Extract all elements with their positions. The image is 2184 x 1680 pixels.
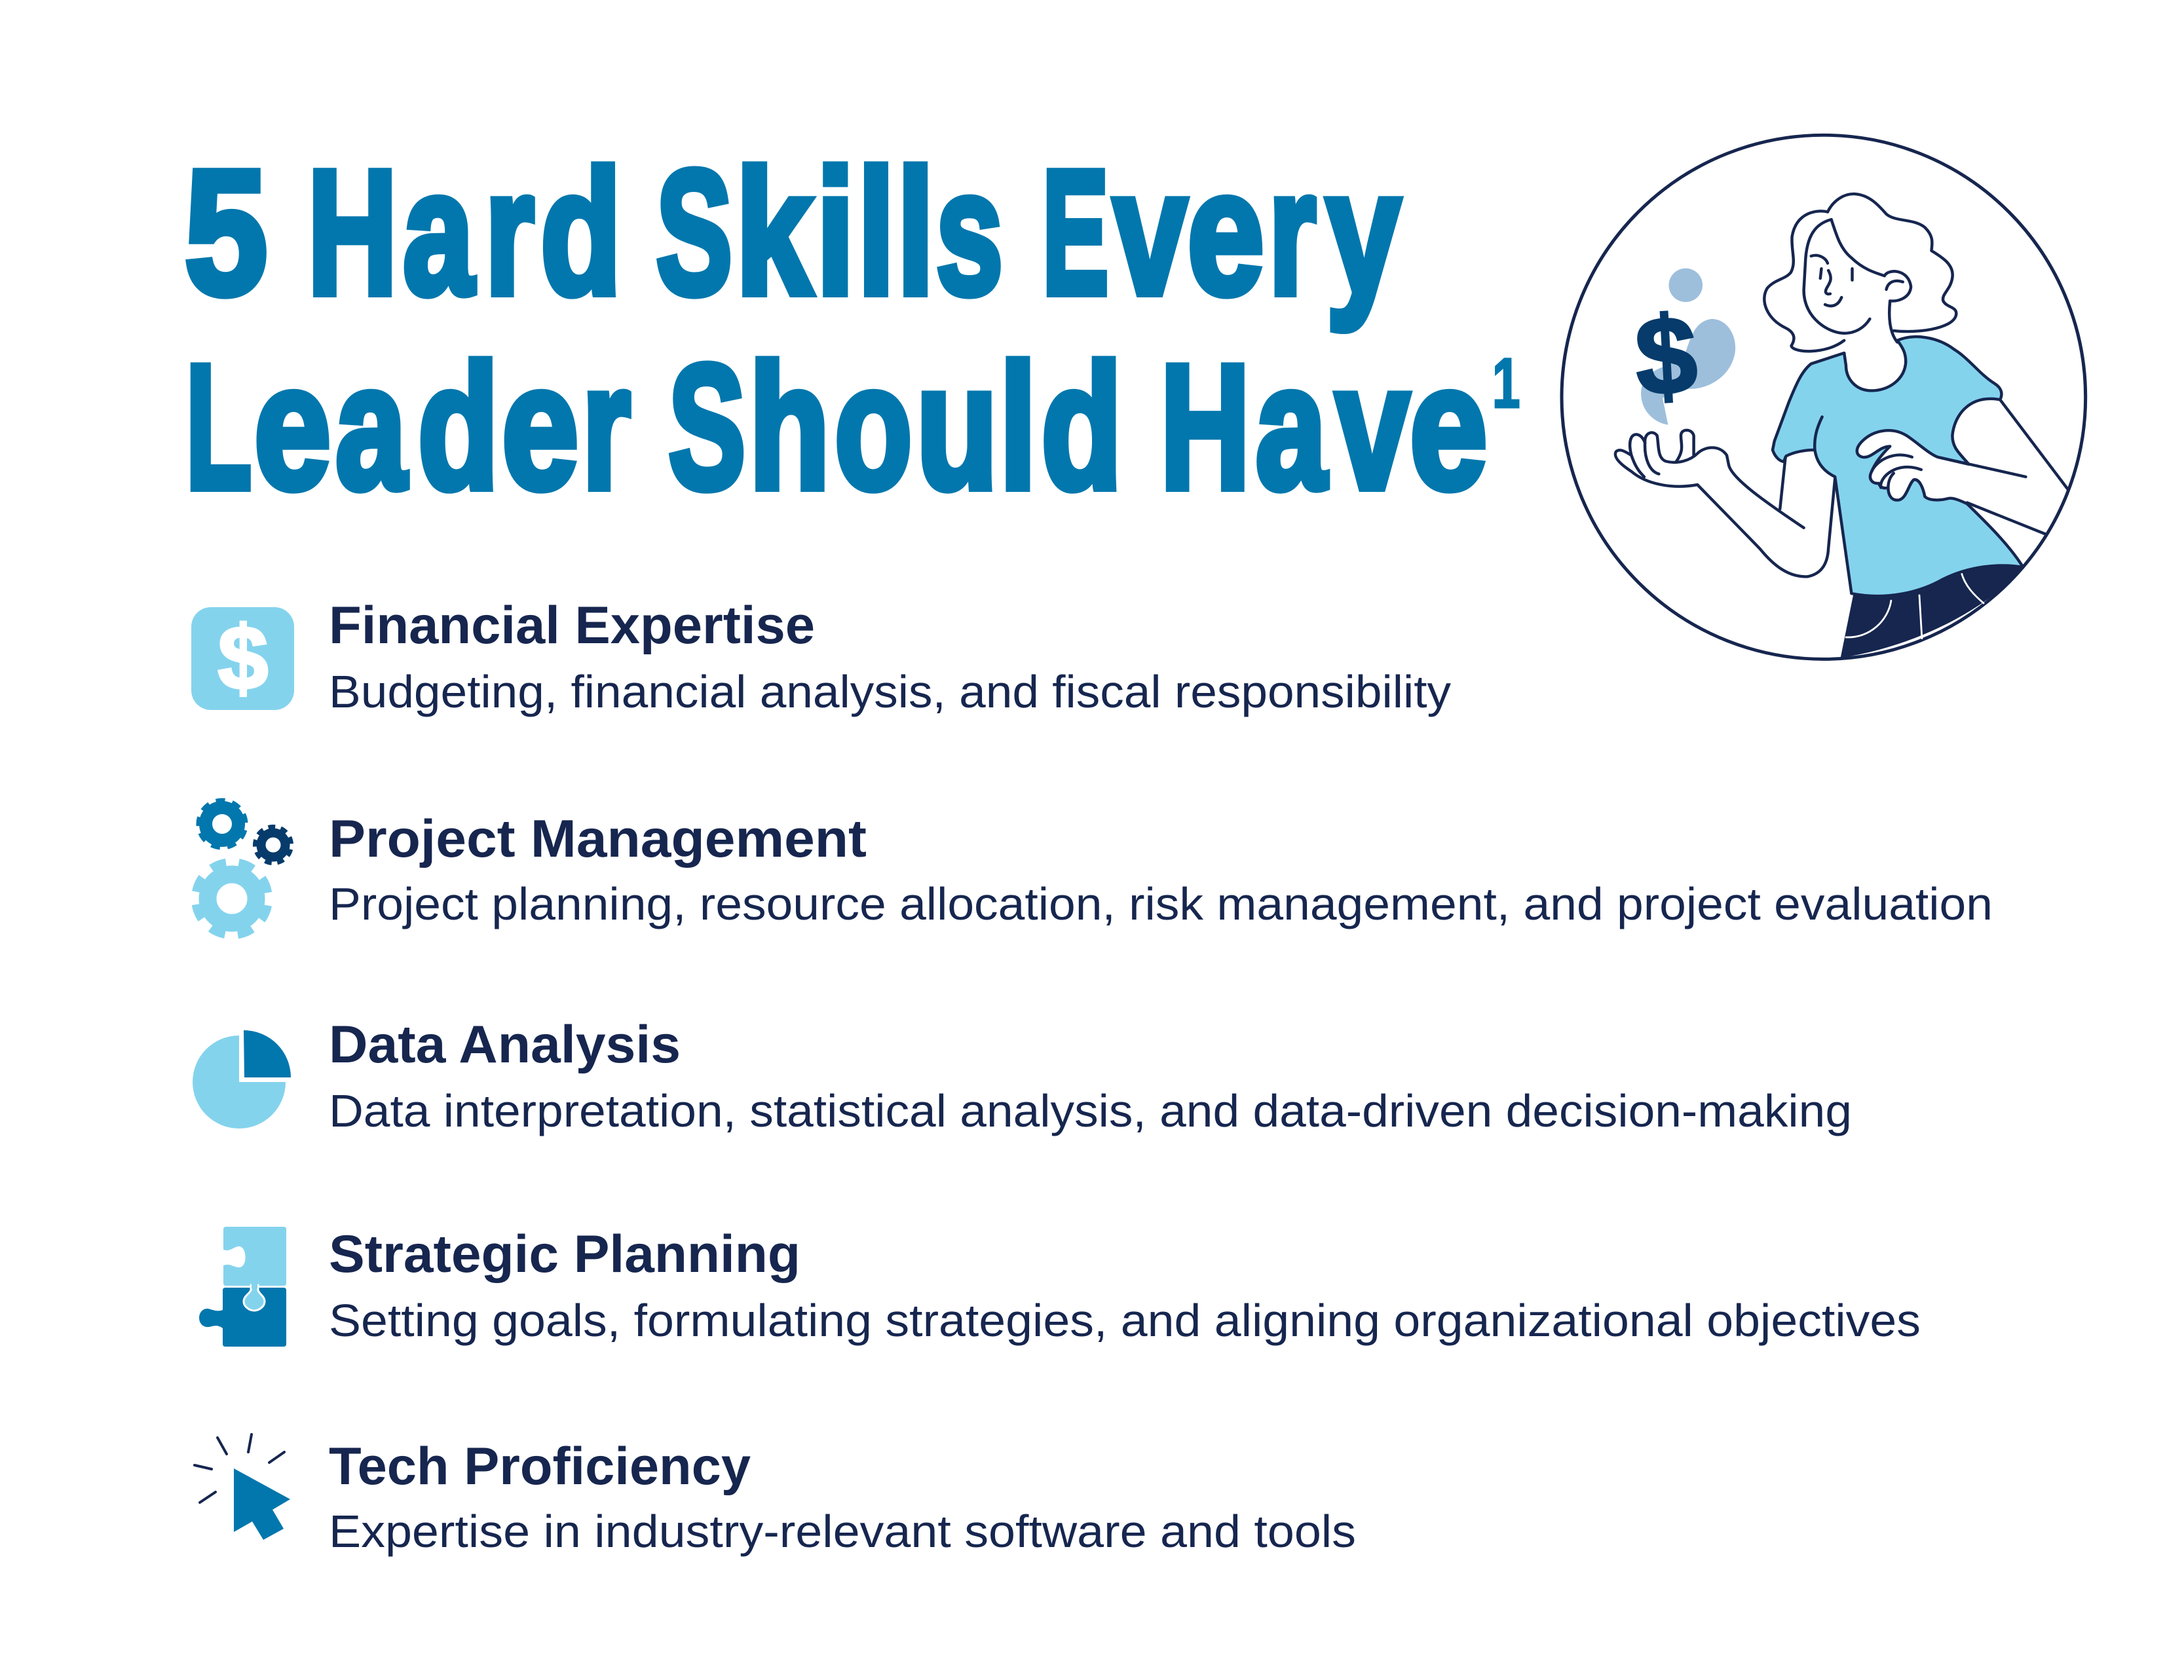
title: s bbox=[936, 134, 1003, 331]
heading: strategic planning: Strategic Planning bbox=[329, 1225, 800, 1284]
illustration circle bbox=[1562, 135, 2086, 659]
dollar sign: $ bbox=[1632, 293, 1700, 419]
title: e bbox=[502, 328, 578, 526]
description: data analysis: Data interpretation, statistical analysis, and data-driven decision-making bbox=[329, 1085, 1852, 1136]
heading: tech proficiency: Tech Proficiency bbox=[329, 1437, 751, 1496]
title: k bbox=[736, 134, 813, 331]
title: r bbox=[485, 134, 534, 331]
description: tech proficiency: Expertise in industry-relevant software and tools bbox=[329, 1506, 1356, 1557]
title: d bbox=[540, 134, 622, 331]
title: a bbox=[403, 134, 474, 331]
row 4: strategic planning bbox=[199, 1225, 1921, 1347]
woman line art: hair, face, arms, hands bbox=[1615, 194, 2068, 576]
title: r bbox=[582, 328, 631, 526]
shirt fold line bbox=[1815, 417, 1822, 450]
icon: puzzle pieces bbox=[199, 1227, 286, 1347]
title: H bbox=[308, 134, 398, 331]
icon: pie chart bbox=[193, 1030, 291, 1129]
row 5: tech proficiency bbox=[195, 1434, 1356, 1557]
title: H bbox=[1160, 328, 1250, 526]
icon: dollar badge bbox=[191, 607, 294, 710]
title: d bbox=[1041, 328, 1122, 526]
title: v bbox=[1336, 328, 1410, 526]
title: 1 bbox=[1492, 344, 1520, 422]
shirt bbox=[1773, 337, 2023, 596]
row 2: project management bbox=[191, 796, 1993, 940]
title: y bbox=[1326, 134, 1401, 332]
illustration: woman with floating dollar sign bbox=[1562, 135, 2086, 659]
title bbox=[185, 134, 1520, 526]
title: o bbox=[835, 328, 912, 526]
title: a bbox=[1256, 328, 1327, 526]
icon: cursor click bbox=[195, 1434, 290, 1540]
description: financial expertise: Budgeting, financial analysis, and fiscal responsibility bbox=[329, 666, 1451, 717]
title: e bbox=[1188, 134, 1264, 331]
title: L bbox=[185, 328, 252, 526]
title: l bbox=[1000, 328, 1036, 526]
title: d bbox=[418, 328, 499, 526]
icon: gears bbox=[191, 796, 295, 940]
title: a bbox=[335, 328, 407, 526]
title: v bbox=[1114, 134, 1188, 331]
title: 5 bbox=[185, 134, 267, 331]
pants bbox=[1841, 565, 2023, 658]
heading: data analysis: Data Analysis bbox=[329, 1015, 681, 1074]
title: S bbox=[668, 328, 745, 526]
title: r bbox=[1269, 134, 1316, 331]
title: l bbox=[897, 134, 934, 331]
title: S bbox=[656, 134, 732, 331]
title: i bbox=[816, 134, 855, 331]
title: u bbox=[916, 328, 998, 526]
row 3: data analysis bbox=[193, 1015, 1852, 1136]
description: project management: Project planning, resource allocation, risk management, and project evaluation bbox=[329, 878, 1993, 929]
title: h bbox=[749, 328, 830, 526]
heading: project management: Project Management bbox=[329, 810, 867, 868]
blue blobs behind dollar bbox=[1641, 269, 1735, 425]
icon: dollar badge: $ bbox=[218, 608, 268, 709]
title: l bbox=[857, 134, 895, 331]
row 1: financial expertise bbox=[191, 596, 1451, 717]
title: e bbox=[1410, 328, 1487, 526]
description: strategic planning: Setting goals, formulating strategies, and aligning organizational objectives bbox=[329, 1295, 1921, 1346]
title: E bbox=[1042, 134, 1108, 331]
heading: financial expertise: Financial Expertise bbox=[329, 596, 815, 655]
title: e bbox=[254, 328, 331, 526]
